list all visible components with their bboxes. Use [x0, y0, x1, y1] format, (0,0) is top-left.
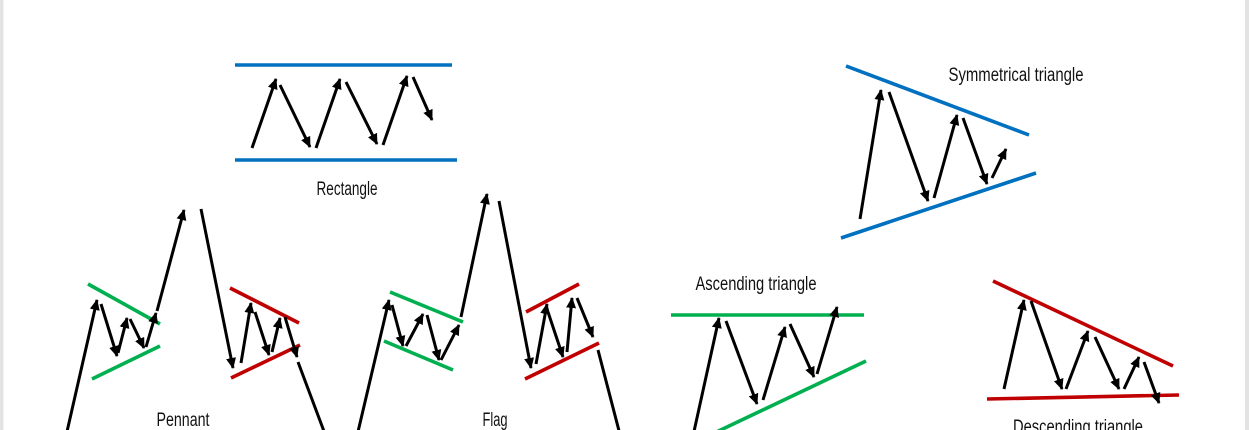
bullish pennant lines [88, 284, 160, 379]
rectangle boundary lines [235, 65, 457, 160]
descending triangle price arrows [1004, 300, 1159, 403]
panel: ascending triangle pattern [671, 274, 866, 430]
bullish flag lines [384, 292, 463, 370]
panel: symmetrical triangle pattern [841, 65, 1084, 238]
symmetrical triangle price arrows [860, 90, 1006, 219]
symmetrical triangle boundary lines [841, 66, 1036, 238]
rectangle price arrows [252, 76, 432, 148]
panel: rectangle pattern [235, 65, 457, 200]
window frame: left edge [0, 0, 4, 430]
flag price arrows [357, 194, 624, 430]
panel: descending triangle pattern [987, 281, 1179, 430]
ascending triangle boundary lines [671, 315, 866, 430]
bearish flag lines [525, 284, 599, 379]
descending triangle boundary lines [987, 281, 1179, 399]
symmetrical triangle label: Symmetrical triangle [948, 65, 1084, 86]
ascending triangle label: Ascending triangle [696, 274, 816, 295]
panel: flag pattern [357, 194, 624, 430]
rectangle label: Rectangle [316, 179, 378, 200]
window frame: right edge [1245, 0, 1249, 430]
ascending triangle price arrows [693, 307, 837, 430]
panel: pennant pattern [66, 209, 331, 430]
pennant price arrows [66, 209, 331, 430]
bearish pennant lines [230, 288, 300, 378]
